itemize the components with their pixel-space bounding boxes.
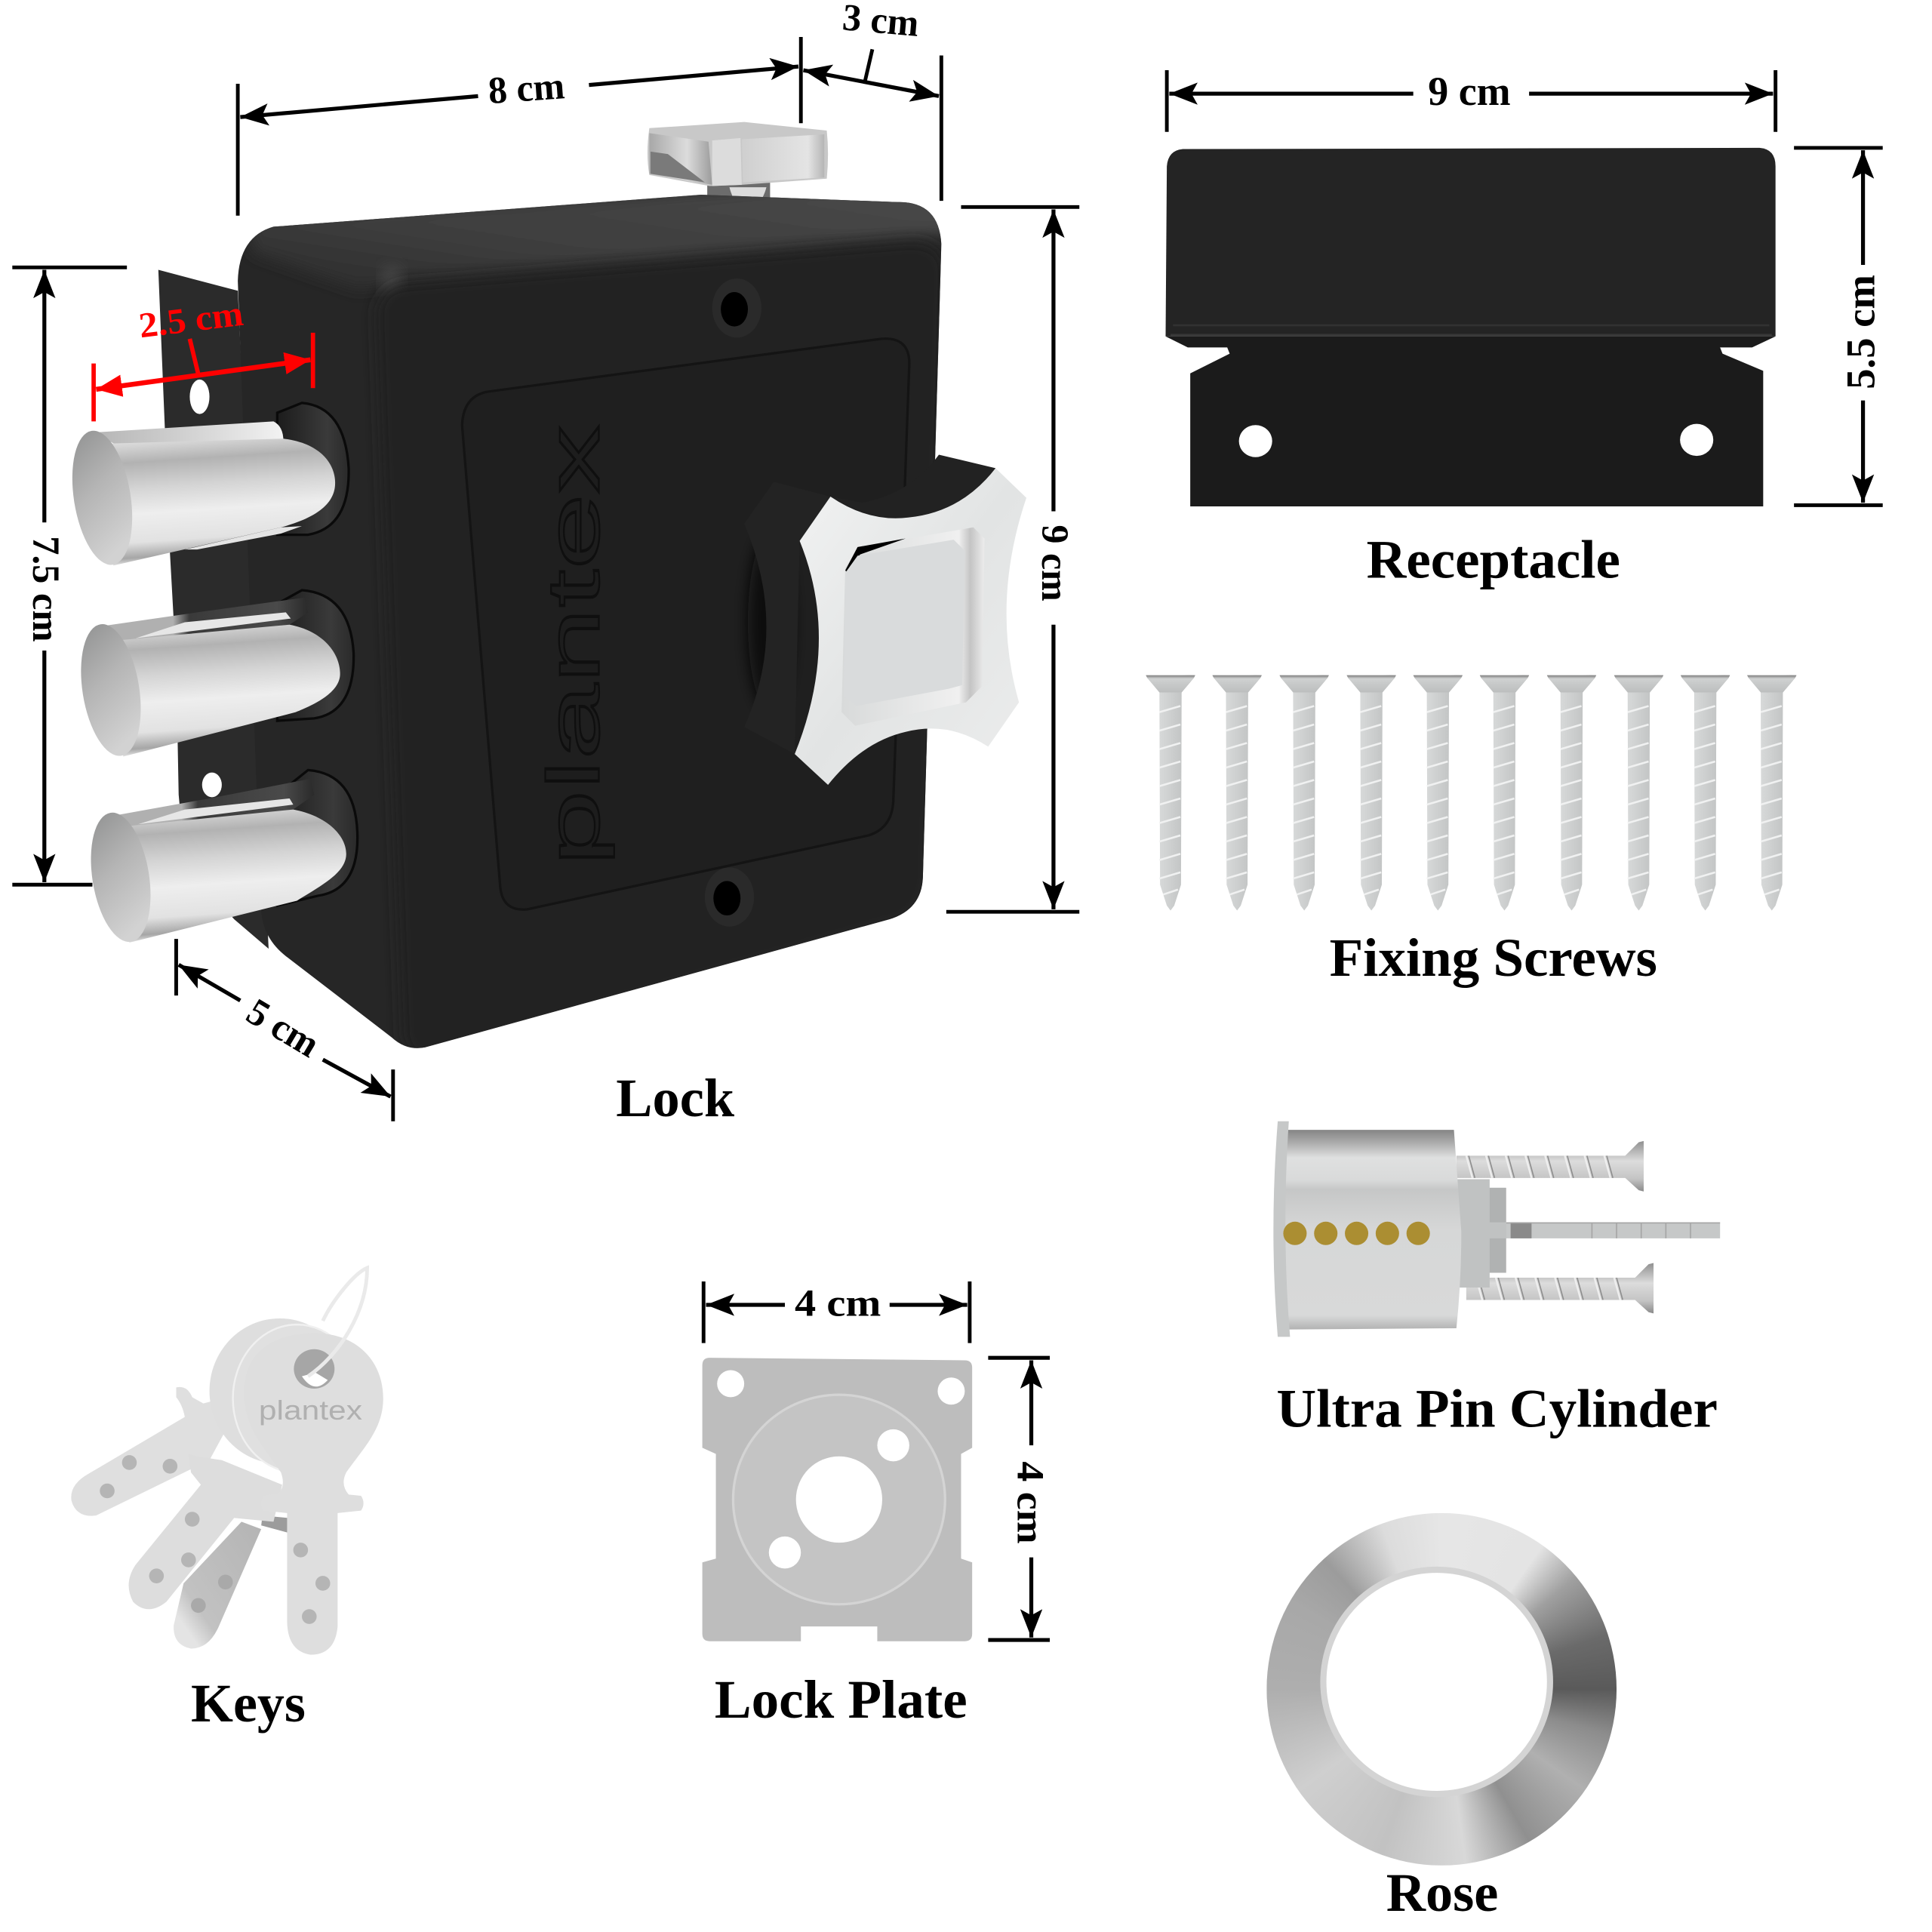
- tailpiece: [1488, 1223, 1720, 1238]
- bracket holes: [189, 380, 222, 797]
- label: Receptacle: Receptacle: [1367, 530, 1620, 590]
- key 2: [129, 1324, 361, 1609]
- dimension: 8 cm: [238, 37, 801, 216]
- top thumb turn stem: [707, 183, 770, 217]
- label: Rose: Rose: [1386, 1863, 1498, 1923]
- raised disc: [733, 1395, 945, 1604]
- plate holes: [717, 1371, 964, 1568]
- knob: [744, 454, 1026, 785]
- body top bevel: [246, 195, 941, 284]
- dimension: 4 cm width: [703, 1281, 970, 1343]
- dimension: 5.5 cm: 5.5 cm: [1838, 275, 1883, 389]
- back key head: [210, 1318, 350, 1464]
- knob recess shadow: [748, 534, 792, 711]
- cylinder body: [1282, 1130, 1461, 1330]
- cylinder flange: [1273, 1121, 1290, 1337]
- label: Fixing Screws: Fixing Screws: [1330, 928, 1657, 988]
- label: Keys: Keys: [191, 1673, 306, 1734]
- panel: ultra pin cylinder: [1273, 1121, 1720, 1337]
- dimension: 9 cm lock height: 9 cm: [1034, 525, 1076, 601]
- fixing screws: [1146, 675, 1796, 911]
- key 1: [71, 1387, 247, 1516]
- dimension: 2.5 cm red: [94, 294, 313, 421]
- rose inner opening: [1323, 1570, 1550, 1794]
- dimension: 2.5 cm red: 2.5 cm: [137, 294, 245, 346]
- plate outline: [703, 1358, 972, 1641]
- label: Ultra Pin Cylinder: Ultra Pin Cylinder: [1276, 1379, 1718, 1439]
- body shading: [247, 179, 961, 1060]
- bolt collars: [277, 403, 358, 906]
- panel: keys: [71, 1268, 383, 1655]
- bolt 3: [82, 779, 346, 946]
- cylinder screws: [1457, 1141, 1654, 1313]
- dimension: 4 cm width: 4 cm: [795, 1282, 881, 1324]
- inset panel: [462, 339, 909, 909]
- dimension: 5 cm: 5 cm: [240, 990, 327, 1066]
- label: Lock: Lock: [616, 1068, 734, 1128]
- panel: rose: [1266, 1513, 1617, 1866]
- lower mounting hole: [705, 867, 754, 927]
- dimension: 7.5 cm: 7.5 cm: [25, 536, 67, 642]
- dimension: 8 cm: 8 cm: [487, 64, 566, 112]
- front key: plantex: [259, 1395, 362, 1426]
- bolt 2: [72, 598, 340, 760]
- receptacle upper box: [1165, 148, 1776, 337]
- dimension: 7.5 cm: [12, 267, 127, 884]
- mounting bracket behind bolts: [158, 270, 269, 949]
- panel: lock: [63, 122, 1026, 1060]
- front key: [244, 1334, 383, 1655]
- body corner glint: [382, 266, 401, 296]
- body front face: [376, 242, 946, 1060]
- dimension: 3 cm: [803, 0, 941, 201]
- dimension: 5.5 cm: [1794, 148, 1883, 505]
- label: Lock Plate: Lock Plate: [715, 1669, 968, 1730]
- receptacle holes: [1239, 424, 1713, 457]
- dimension: 9 cm receptacle width: [1167, 69, 1776, 132]
- dimension: 9 cm lock height: [946, 207, 1079, 912]
- dimension: 5 cm: [176, 939, 393, 1121]
- embossed logo: plantex: [531, 425, 614, 866]
- upper mounting hole: [712, 278, 761, 337]
- dimension: 9 cm receptacle width: 9 cm: [1428, 69, 1511, 114]
- key 3: [174, 1515, 288, 1648]
- panel: lock plate: [703, 1358, 972, 1641]
- dimension: 4 cm height: [988, 1358, 1052, 1640]
- key ring loop: [308, 1268, 368, 1377]
- bolt 1: [63, 421, 335, 569]
- brass pins: [1283, 1222, 1430, 1245]
- dimension: 4 cm height: 4 cm: [1010, 1461, 1052, 1544]
- cylinder rear hub: [1455, 1179, 1506, 1287]
- panel: receptacle: [1165, 148, 1776, 506]
- receptacle lower plate: [1165, 337, 1776, 506]
- lock body: [238, 195, 941, 1048]
- top thumb turn: [648, 122, 828, 186]
